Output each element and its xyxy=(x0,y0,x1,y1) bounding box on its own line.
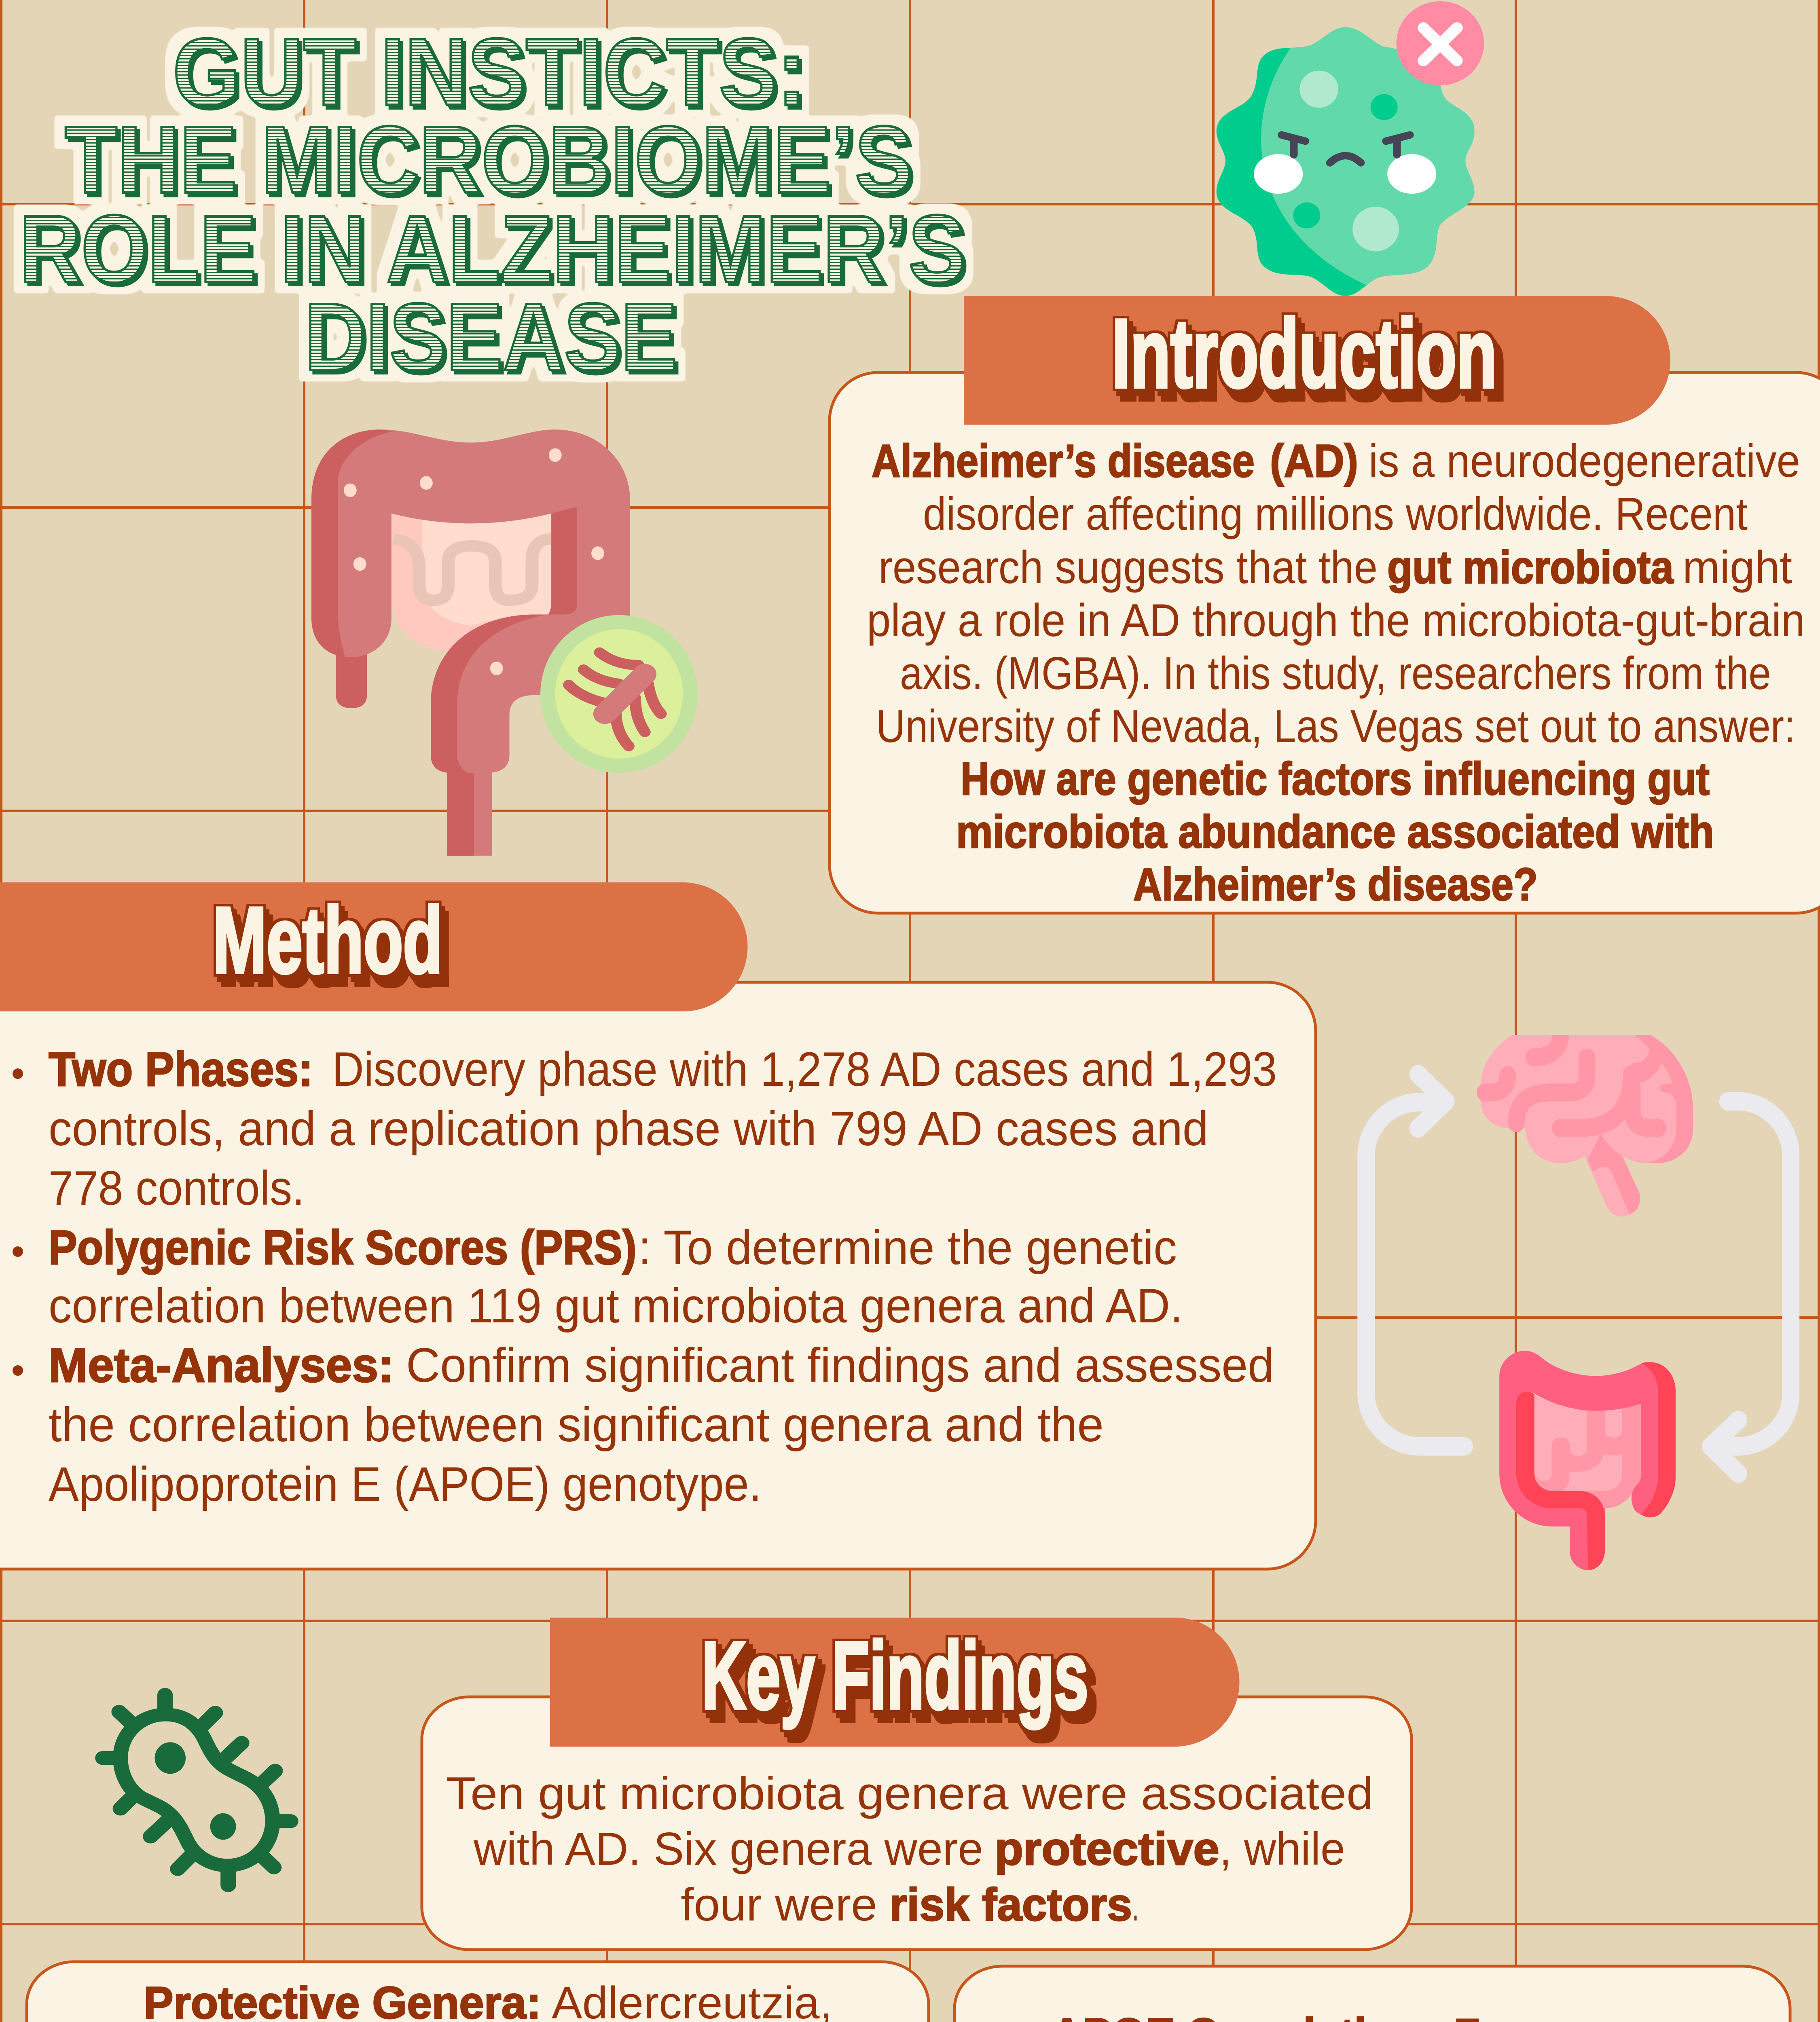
title: DISEASE xyxy=(305,283,677,391)
method bullet list: Discovery phase with 1,278 AD cases and 1,293 xyxy=(332,1042,1277,1096)
heading: introduction banner: Introduction xyxy=(1112,299,1497,408)
introduction body text: How are genetic factors influencing gut xyxy=(961,753,1710,805)
key findings body text: . xyxy=(1132,1879,1139,1931)
APOE card xyxy=(954,1966,1790,2022)
title: ROLE IN ALZHEIMER’S xyxy=(19,195,965,302)
key findings body text: , while xyxy=(1219,1823,1345,1875)
panel: APOE correlation xyxy=(954,1966,1790,2022)
key findings card xyxy=(422,1697,1412,1950)
introduction body text: might xyxy=(1682,542,1792,593)
method bullet list: 778 controls. xyxy=(49,1161,305,1215)
method bullet list: Meta-Analyses: xyxy=(49,1338,394,1392)
key findings body text: Ten gut microbiota genera were associated xyxy=(446,1768,1373,1819)
heading: method banner: Method xyxy=(213,888,442,993)
introduction body text xyxy=(867,436,1805,910)
method bullet list xyxy=(13,1042,1277,1511)
key findings body text: four were xyxy=(681,1879,877,1931)
panel: introduction xyxy=(830,296,1820,913)
method bullet list: correlation between 119 gut microbiota genera and AD. xyxy=(49,1279,1183,1333)
heading: key findings banner: Key Findings xyxy=(702,1622,1088,1729)
method bullet list: Two Phases: xyxy=(49,1042,313,1096)
key findings body text: protective xyxy=(995,1823,1219,1875)
introduction card xyxy=(830,372,1820,913)
introduction body text: research suggests that the xyxy=(878,542,1378,593)
method bullet list: controls, and a replication phase with 799 AD cases and xyxy=(49,1102,1208,1156)
panel: key findings xyxy=(422,1618,1412,1950)
heading: key findings banner xyxy=(550,1618,1239,1747)
method card xyxy=(0,982,1316,1569)
method bullet list: Apolipoprotein E (APOE) genotype. xyxy=(49,1457,762,1511)
introduction body text: Alzheimer’s disease xyxy=(872,436,1255,487)
key findings body text: with AD. Six genera were xyxy=(473,1823,983,1875)
introduction body text: gut microbiota xyxy=(1387,542,1674,593)
heading: introduction banner xyxy=(964,296,1670,425)
icon: angry green microbe xyxy=(1217,1,1484,296)
method bullet list: Polygenic Risk Scores (PRS) xyxy=(49,1220,637,1275)
method bullet list: : To determine the genetic xyxy=(638,1220,1177,1275)
panel: method xyxy=(0,882,1316,1569)
icon: intestine with bacterium xyxy=(311,429,698,856)
introduction body text: (AD) xyxy=(1270,436,1358,487)
icon: gut-brain axis cycle xyxy=(1366,1032,1791,1570)
heading: method banner xyxy=(0,882,747,1011)
introduction body text: disorder affecting millions worldwide. Recent xyxy=(923,489,1748,540)
title: THE MICROBIOME’S xyxy=(65,106,912,214)
key findings body text: risk factors xyxy=(889,1879,1132,1931)
method bullet list: Confirm significant findings and assessed xyxy=(406,1338,1274,1392)
introduction body text: microbiota abundance associated with xyxy=(956,806,1714,858)
genera card xyxy=(27,1962,929,2022)
key findings body text xyxy=(446,1768,1373,1931)
icon: green outlined bacterium xyxy=(103,1695,291,1885)
panel: protective and risk genera xyxy=(27,1962,929,2022)
method bullet list: the correlation between significant genera and the xyxy=(49,1398,1104,1452)
APOE body text xyxy=(1014,2009,1743,2022)
genera body text xyxy=(82,1978,893,2022)
title xyxy=(19,19,965,391)
introduction body text: Alzheimer’s disease? xyxy=(1133,859,1538,910)
title: GUT INSTICTS: xyxy=(173,19,806,126)
